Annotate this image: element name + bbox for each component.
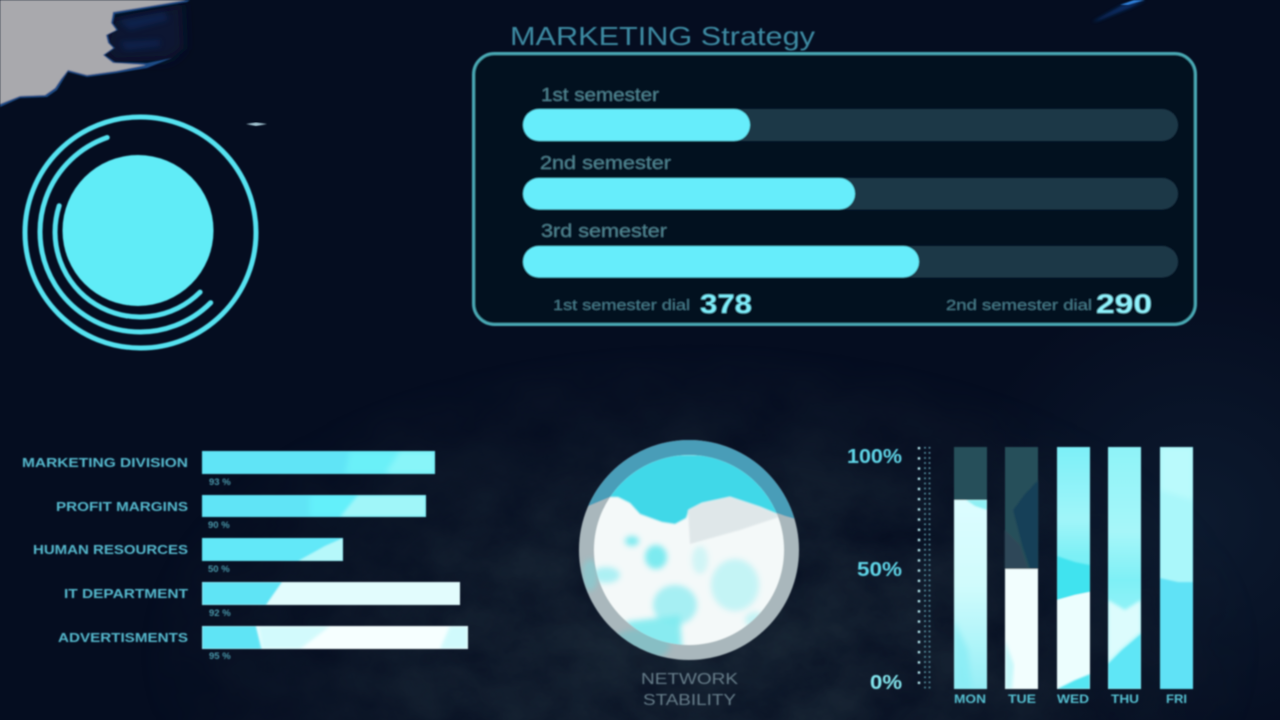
bar: 3rd semester bbox=[523, 246, 1178, 278]
label: network stability bbox=[641, 671, 738, 709]
y-axis labels: 50% bbox=[857, 559, 902, 581]
y-axis labels: 0% bbox=[870, 672, 902, 694]
disc inner fill bbox=[592, 455, 784, 650]
stat: 1st semester dial: 1st semester dial bbox=[553, 297, 690, 314]
bar: Friday: FRI bbox=[1166, 692, 1187, 706]
row: advertisments: 95 % bbox=[209, 651, 231, 662]
stat: 2nd semester dial: 290 bbox=[1096, 289, 1152, 319]
label: network stability: STABILITY bbox=[643, 692, 736, 709]
bar: Thursday: THU bbox=[1111, 692, 1139, 706]
gauge middle arc bbox=[40, 138, 211, 332]
stat: 2nd semester dial: 2nd semester dial bbox=[946, 297, 1092, 314]
bar: Thursday bbox=[1108, 447, 1141, 706]
row: human resources: HUMAN RESOURCES bbox=[33, 542, 188, 557]
stat: 2nd semester dial bbox=[946, 289, 1152, 319]
y-axis dotted scale bbox=[919, 447, 930, 689]
row: IT department: IT DEPARTMENT bbox=[64, 586, 188, 601]
label: network stability: NETWORK bbox=[641, 671, 738, 688]
y-axis labels: 100% bbox=[847, 446, 902, 468]
label: 2nd semester: 2nd semester bbox=[540, 152, 671, 173]
row: human resources bbox=[33, 538, 343, 575]
chart: department horizontal bars bbox=[22, 451, 468, 662]
bar: Monday bbox=[954, 447, 987, 706]
row: profit margins bbox=[56, 495, 426, 531]
title: Marketing Strategy: MARKETING Strategy bbox=[510, 21, 815, 51]
bar: Tuesday: TUE bbox=[1008, 692, 1036, 706]
row: profit margins: PROFIT MARGINS bbox=[56, 499, 188, 514]
gauge solid disc bbox=[62, 155, 214, 306]
row: marketing division bbox=[22, 451, 435, 488]
row: IT department bbox=[64, 582, 460, 619]
land mass: top-left grey coast bbox=[0, 0, 190, 107]
bar: Wednesday: WED bbox=[1057, 692, 1089, 706]
gauge inner arc bbox=[55, 206, 200, 317]
bar: Tuesday bbox=[1005, 447, 1038, 706]
panel frame bbox=[474, 54, 1196, 324]
gauge outer ring bbox=[25, 117, 256, 348]
disc outer ring bbox=[579, 440, 799, 661]
chart: weekly vertical bars bbox=[847, 446, 1193, 706]
row: advertisments: ADVERTISMENTS bbox=[58, 630, 188, 645]
row: IT department: 92 % bbox=[209, 608, 231, 619]
label: 1st semester: 1st semester bbox=[541, 84, 659, 105]
gauge: concentric circle indicator bbox=[25, 117, 256, 348]
gauge: network stability disc bbox=[579, 440, 799, 661]
panel: semester progress bbox=[474, 54, 1196, 324]
row: profit margins: 90 % bbox=[208, 520, 230, 531]
stat: 1st semester dial bbox=[553, 289, 752, 319]
row: advertisments bbox=[58, 626, 468, 662]
bar: Wednesday bbox=[1057, 447, 1090, 706]
row: human resources: 50 % bbox=[208, 564, 230, 575]
bar: Friday bbox=[1160, 447, 1193, 706]
stat: 1st semester dial: 378 bbox=[700, 289, 752, 319]
y-axis labels bbox=[847, 446, 902, 694]
bar: 2nd semester bbox=[523, 178, 1178, 210]
label: 3rd semester: 3rd semester bbox=[541, 220, 667, 241]
bar: 1st semester bbox=[523, 109, 1178, 141]
row: marketing division: 93 % bbox=[209, 477, 231, 488]
row: marketing division: MARKETING DIVISION bbox=[22, 455, 188, 470]
bar: Monday: MON bbox=[954, 692, 986, 706]
